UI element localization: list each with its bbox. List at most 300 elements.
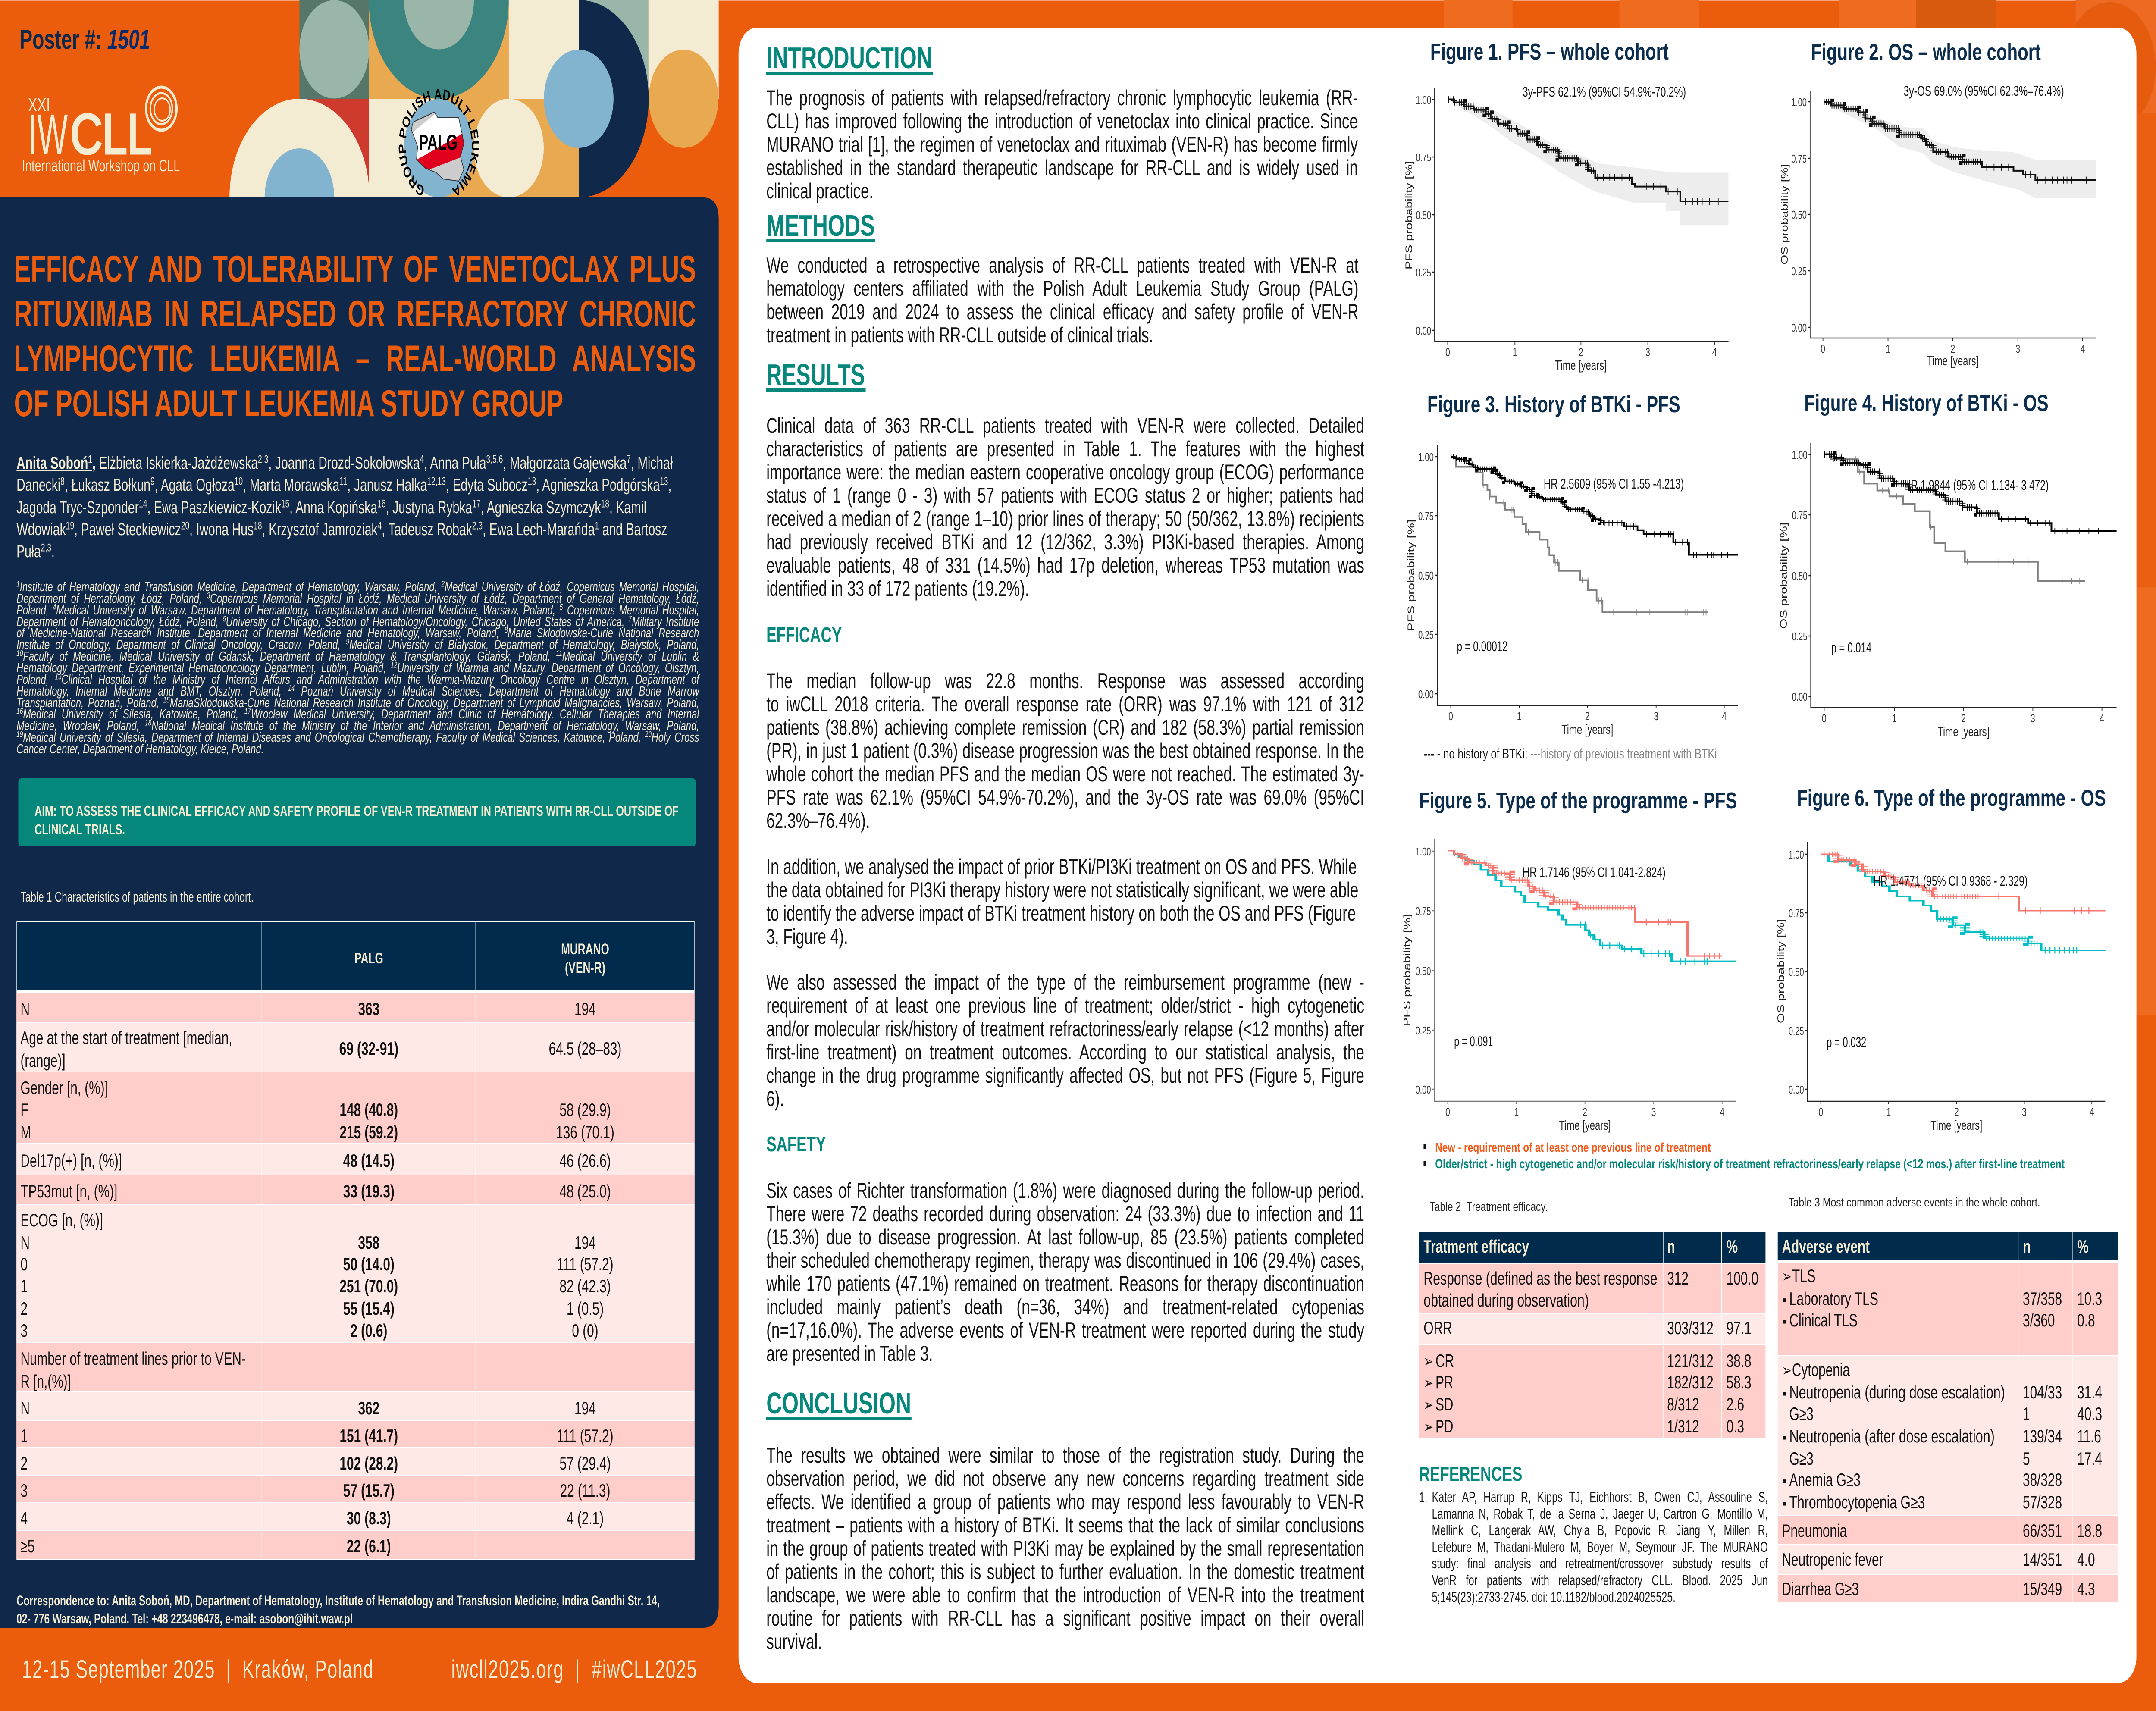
table 2 header [1423,1236,1738,1257]
table 1 row labels: 4 [20,1508,28,1528]
poster number: Poster #: 1501 [19,24,150,55]
table 3 percent values: 0.8 [2077,1310,2095,1330]
table 2 rows: 303/312 [1667,1318,1714,1338]
chart: figure 2 OS whole cohort: 0.25 [1791,265,1807,278]
title: figure 4: Figure 4. History of BTKi - OS [1804,390,2049,416]
affiliations: 16Medical University of Silesia, Katowice, Poland, 17Wrocław Medical University, Department and Clinic of Hematology, Cellular Therapies and Internal [16,706,699,721]
chart: figure 4 history of BTKi OS: 0.25 [1792,630,1807,643]
chart: figure 2 OS whole cohort: 0 [1821,342,1825,355]
table 2 rows: 8/312 [1667,1394,1699,1414]
chart: figure 5 type of programme PFS: 2 [1583,1106,1587,1119]
table 2 rows: 38.8 [1727,1351,1752,1371]
table 3 event labels: ▪ [1783,1313,1786,1330]
text: results overview [766,414,1364,600]
chart: figure 5 type of programme PFS: 1 [1514,1106,1519,1119]
table 2 rows: ➢ [1423,1352,1433,1370]
text: efficacy paragraph 2: In addition, we analysed the impact of prior BTKi/PI3Ki treatment on OS and PFS. While [766,855,1357,879]
affiliations: Cancer Center, Department of Hematology, Kielce, Poland. [16,741,264,756]
text: safety: (n=17,16.0%). The adverse events of VEN-R treatment were reported during the study [766,1318,1364,1342]
text: safety: Six cases of Richter transformation (1.8%) were diagnosed during the follow-up period. [766,1178,1364,1203]
chart: figure 6 type of programme OS: 2 [1954,1106,1959,1119]
table 1 row labels: M [20,1122,31,1142]
table 1 row labels: N [20,1398,30,1418]
table 3 n values: 3/360 [2023,1310,2055,1330]
chart: figure 3 history of BTKi PFS: p = 0.00012 [1457,639,1507,654]
table 3 event labels: Neutropenic fever [1782,1549,1883,1570]
table 2 rows: 97.1 [1727,1318,1752,1338]
main title: OF POLISH ADULT LEUKEMIA STUDY GROUP [14,383,563,424]
chart: figure 5 type of programme PFS: p = 0.091 [1454,1034,1493,1049]
chart: figure 2 OS whole cohort: 1.00 [1791,96,1807,109]
text: conclusion: survival. [766,1630,822,1654]
chart: figure 2 OS whole cohort: 0.00 [1791,322,1807,334]
table 3 event labels: Diarrhea G≥3 [1782,1579,1859,1599]
table 1 PALG values: 48 (14.5) [343,1150,395,1171]
text: efficacy paragraph 3 [766,971,1364,1110]
authors: Puła2,3. [16,542,55,561]
table 1 row labels: 3 [20,1320,28,1341]
text: reference 1: Lefebure M, Thadani-Mulero M, Boyer M, Seymour JF. The MURANO [1432,1539,1768,1555]
table 3 event labels: ➢ [1782,1267,1792,1285]
text: reference 1: Kater AP, Harrup R, Kipps TJ, Eichhorst B, Owen CJ, Assouline S, [1432,1489,1768,1505]
heading: results: RESULTS [766,358,865,392]
text: results overview: identified in 33 of 172 patients (19.2%). [766,577,1029,601]
table 3 event labels: ➢ [1782,1361,1792,1379]
chart: figure 1 PFS whole cohort: 1 [1513,346,1517,359]
affiliations [16,581,699,755]
authors: Danecki8, Łukasz Bołkun9, Agata Ogłoza10, Marta Morawska11, Janusz Halka12,13, Edyta Subocz13, Agnieszka Podgórska13, [16,476,671,495]
text: safety: their scheduled chemotherapy regimen, therapy was discontinued in 106 (29.4%) cases, [766,1248,1364,1272]
caption: table 2: Table 2 Treatment efficacy. [1430,1200,1548,1214]
reference number: 1. [1419,1490,1427,1506]
text: results overview: status of 1 (range 0 - 3) with 57 patients with ECOG status 2 or higher; patients had [766,483,1364,508]
table 1 PALG values: 22 (6.1) [347,1536,391,1556]
table 3 event labels: Clinical TLS [1789,1310,1858,1330]
table 3 event labels: Cytopenia [1792,1360,1850,1380]
table 3 header: Adverse event [1782,1236,1870,1257]
table 1 row labels: 2 [20,1453,28,1473]
main title: EFFICACY AND TOLERABILITY OF VENETOCLAX PLUS [14,248,696,290]
caption: table 1: Table 1 Characteristics of patients in the entire cohort. [20,889,254,905]
logo: iwCLL: IW [28,103,68,166]
table 1 PALG values: 102 (28.2) [340,1453,398,1473]
affiliations: Hematology, Internal Medicine and BMT, Olsztyn, Poland, 14 Poznań University of Medical Sciences, Department of Hematology and Bone Marrow [16,683,699,699]
text: efficacy paragraph 3: and/or molecular risk/history of treatment refractoriness/early relapse (<12 months) after [766,1017,1364,1041]
text: efficacy paragraph 1: patients (38.8%) achieving complete remission (CR) and 182 (58.3%) partial remission [766,715,1364,740]
chart: figure 5 type of programme PFS: PFS probability [%] [1402,914,1412,1026]
table 2 rows: 312 [1667,1268,1689,1288]
chart: figure 6 type of programme OS: HR 1.4771 (95% CI 0.9368 - 2.329) [1874,873,2028,889]
chart: figure 3 history of BTKi PFS: 0.00 [1418,688,1434,701]
chart: figure 4 history of BTKi OS: 4 [2100,712,2104,725]
table 3 n values: 38/328 [2023,1470,2062,1490]
chart: figure 2 OS whole cohort: 0.50 [1791,209,1807,221]
table 1 header: (VEN-R) [565,960,605,976]
table 1 row labels: Age at the start of treatment [median, [20,1028,232,1048]
aim callout: CLINICAL TRIALS. [34,822,125,838]
text: methods: treatment in patients with RR-CLL outside of clinical trials. [766,323,1153,347]
table 3 n values: 5 [2023,1448,2030,1469]
table 1 PALG values: 362 [358,1398,379,1418]
text: results overview: importance were: the median eastern cooperative oncology group (ECOG) performance [766,460,1364,484]
title: figure 3: Figure 3. History of BTKi - PFS [1427,392,1680,417]
text: safety: are presented in Table 3. [766,1341,933,1366]
chart: figure 5 type of programme PFS: 0.25 [1416,1025,1431,1037]
table 3: adverse events [1778,1232,2118,1602]
text: efficacy paragraph 3: We also assessed the impact of the type of the reimbursement programme (new - [766,970,1364,994]
authors: Wdowiak19, Paweł Steckiewicz20, Iwona Hus18, Krzysztof Jamroziak4, Tadeusz Robak2,3, Ewa Lech-Marańda1 and Bartosz [16,520,667,539]
chart: figure 3 history of BTKi PFS: 4 [1722,710,1727,723]
table 1 row labels: 2 [20,1298,28,1319]
table 3 n values: 139/34 [2023,1426,2062,1446]
chart: figure 2 OS whole cohort: 4 [2081,342,2085,355]
chart: figure 3 history of BTKi PFS: 0.50 [1418,570,1434,582]
chart: figure 5 type of programme PFS: 0.00 [1416,1084,1431,1096]
text: efficacy paragraph 3: first-line treatment) on treatment outcomes. According to our statistical analysis, the [766,1040,1364,1064]
chart: figure 2 OS whole cohort: 0.75 [1791,153,1807,165]
chart: figure 5 type of programme PFS: 3 [1651,1106,1656,1119]
table 1 MURANO values: 58 (29.9) [559,1100,611,1120]
table 1: patient characteristics [16,921,695,1560]
caption: table 3: Table 3 Most common adverse events in the whole cohort. [1789,1196,2040,1210]
affiliations: Medicine, Wrocław, Poland, 18National Medical Institute of the Ministry of the Interior and Administration, Department of Hematology, Warsaw, Poland, [16,718,699,733]
table 1 MURANO values: 1 (0.5) [567,1298,604,1319]
table 2 rows: 121/312 [1667,1351,1714,1371]
table 1 MURANO values: 194 [574,1232,596,1253]
table 1 row labels: ECOG [n, (%)] [20,1210,103,1230]
chart: figure 4 history of BTKi OS: OS probability [%] [1778,523,1789,629]
chart: figure 3 history of BTKi PFS: 0.75 [1418,510,1434,523]
text: efficacy paragraph 1: 62.3%–76.4%). [766,808,870,833]
table 3 percent values: 4.0 [2077,1549,2095,1570]
table 1 MURANO values: 48 (25.0) [559,1181,611,1201]
table 3 event labels: ▪ [1783,1385,1786,1402]
table 3 percent values: 4.3 [2077,1579,2095,1599]
text: introduction: The prognosis of patients with relapsed/refractory chronic lymphocytic leukemia (RR- [766,86,1358,110]
table 1 MURANO values: 64.5 (28–83) [549,1038,621,1059]
text: introduction [766,86,1358,203]
text: introduction: MURANO trial [1], the regimen of venetoclax and rituximab (VEN-R) has become firmly [766,132,1358,157]
chart: figure 1 PFS whole cohort: 2 [1579,346,1583,359]
chart: figure 4 history of BTKi OS: 2 [1961,712,1966,725]
panel: navy left column [0,197,719,1628]
table 3 percent values: 11.6 [2077,1426,2101,1446]
table 1 row labels: 3 [20,1480,28,1501]
table 1 MURANO values: 57 (29.4) [559,1453,611,1473]
logo: PALG Polish Adult Leukemia Group: PALG [419,131,458,155]
table 3 n values: 14/351 [2023,1549,2062,1570]
table 1 row labels: 1 [20,1276,28,1296]
chart: figure 3 history of BTKi PFS: PFS probability [%] [1406,519,1416,631]
table 3 event labels: Laboratory TLS [1789,1288,1878,1309]
table 1 MURANO values: 111 (57.2) [557,1426,614,1446]
logo: iwCLL: CLL [70,103,152,166]
table 1 row labels: Number of treatment lines prior to VEN- [20,1348,246,1369]
table 3 event labels: G≥3 [1789,1448,1814,1469]
authors: Anita Soboń1, Elżbieta Iskierka-Jażdżewska2,3, Joanna Drozd-Sokołowska4, Anna Puła3,5,6, Małgorzata Gajewska7, Michał [16,454,673,473]
table 1 PALG values: 69 (32-91) [339,1038,398,1059]
table 2 header: n [1667,1236,1675,1257]
table 3 event labels: Neutropenia (after dose escalation) [1789,1426,1995,1446]
panel: white content area [739,28,2137,1683]
chart: figure 5 type of programme PFS: 1.00 [1416,846,1431,858]
table 1 MURANO values: 22 (11.3) [560,1480,610,1501]
table 1 MURANO values: 46 (26.6) [559,1150,611,1171]
chart: figure 4 history of BTKi OS: 0.75 [1792,509,1807,522]
table 1 MURANO values: 82 (42.3) [559,1276,611,1296]
table 2 rows: CR [1435,1351,1454,1371]
chart: figure 4 history of BTKi OS: HR 1.9844 (95% CI 1.134- 3.472) [1904,477,2049,493]
text: methods: We conducted a retrospective analysis of RR-CLL patients treated with VEN-R at [766,253,1359,277]
text: methods: between 2019 and 2024 to assess the clinical efficacy and safety profile of VEN-R [766,300,1359,324]
table 1 row labels: 1 [20,1426,28,1446]
table 2 rows: ➢ [1423,1395,1433,1414]
chart: figure 3 history of BTKi PFS: 1 [1517,710,1522,723]
chart: figure 3 history of BTKi PFS: Time [years] [1561,722,1613,737]
decorative geometric header [229,0,719,197]
footer: website and hashtag: iwcll2025.org | #iwCLL2025 [451,1655,697,1683]
table 1 PALG values: 251 (70.0) [340,1276,398,1296]
chart: figure 4 history of BTKi OS [1778,443,2117,739]
main title [14,247,696,426]
chart: figure 4 history of BTKi OS: 3 [2031,712,2035,725]
chart: figure 5 type of programme PFS: 0.75 [1416,905,1431,918]
text: results overview: Clinical data of 363 RR-CLL patients treated with VEN-R were collected. Detailed [766,414,1364,438]
logo: iwCLL: International Workshop on CLL [22,156,180,175]
table 1 PALG values: 215 (59.2) [340,1122,398,1142]
text: introduction: established in the standard therapeutic landscape for RR-CLL and is widely used in [766,156,1358,180]
text: reference 1: Mellink C, Langerak AW, Chyla B, Popovic R, Jiang Y, Millen R, [1432,1522,1768,1538]
affiliations: Transplantation, Poznań, Poland, 15MariaSklodowska-Curie National Research Institute of Oncology, Department of Lymphoid Malignancies, Warsaw, Poland, [16,695,699,710]
table 3 event labels: G≥3 [1789,1404,1814,1424]
affiliations: of Medicine-National Research Institute, Department of Internal Medicine and Hematology, Warsaw, Poland, 8Maria Sklodowska-Curie National Research [16,625,699,640]
chart: figure 6 type of programme OS: 0 [1818,1106,1823,1119]
table 3 event labels: TLS [1792,1266,1816,1286]
title: figure 1: Figure 1. PFS – whole cohort [1430,39,1669,65]
table 2 header: % [1727,1236,1738,1257]
affiliations: 1Institute of Hematology and Transfusion Medicine, Department of Hematology, Warsaw, Poland, 2Medical University of Łódź, Copernicus Memorial Hospital, [16,579,699,594]
text: efficacy paragraph 1: PFS rate was 62.1% (95%CI 54.9%-70.2%), and the 3y-OS rate was 69.0% (95%CI [766,785,1364,809]
heading: methods: METHODS [767,209,875,242]
text: safety: while 170 patients (47.1%) remained on treatment. Reasons for therapy discontinuation [766,1272,1364,1296]
table 1 PALG values: 55 (15.4) [343,1298,395,1319]
table 1 PALG values: 57 (15.7) [343,1480,395,1501]
text: reference 1 [1432,1489,1768,1605]
title: figure 2: Figure 2. OS – whole cohort [1811,39,2041,65]
chart: figure 5 type of programme PFS [1402,839,1736,1133]
text: reference 1: VenR for patients with relapsed/refractory CLL. Blood. 2025 Jun [1432,1572,1768,1588]
chart: figure 1 PFS whole cohort: Time [years] [1555,357,1607,373]
table 1 MURANO values: 111 (57.2) [557,1254,614,1274]
text: efficacy paragraph 1: The median follow-up was 22.8 months. Response was assessed according [766,669,1364,693]
table 2 rows: 58.3 [1727,1372,1752,1392]
chart: figure 2 OS whole cohort: OS probability [%] [1779,164,1790,265]
text: results overview: evaluable patients, 48 of 331 (14.5%) had 17p deletion, whereas TP53 mutation was [766,553,1364,577]
chart: figure 3 history of BTKi PFS: 2 [1585,710,1590,723]
chart: figure 1 PFS whole cohort: 0.00 [1416,325,1431,337]
table 2: treatment efficacy [1419,1232,1765,1438]
chart: figure 5 type of programme PFS: 0.50 [1416,965,1431,978]
table 1 PALG values: 148 (40.8) [340,1100,398,1120]
text: results overview: characteristics of patients are presented in Table 1. The features with the highest [766,437,1364,461]
chart: figure 2 OS whole cohort: 3 [2015,342,2020,355]
table 3 header [1782,1236,2089,1257]
text: conclusion: routine for patients with RR-CLL has a significant positive impact on their overall [766,1606,1364,1630]
text: conclusion: in the group of patients treated with PI3Ki may be explained by the small representation [766,1536,1364,1561]
logo: iwCLL [22,87,180,175]
chart: figure 3 history of BTKi PFS: 3 [1654,710,1658,723]
table 2 header: Tratment efficacy [1423,1236,1529,1257]
text: methods: hematology centers affiliated with the Polish Adult Leukemia Study Group (PALG) [766,276,1359,301]
text: results overview: had previously received BTKi and 12 (12/362, 3.3%) PI3Ki-based therapies. Among [766,530,1364,554]
chart: figure 6 type of programme OS: 0.75 [1789,907,1804,920]
text: safety [766,1179,1364,1365]
subheading: safety: SAFETY [766,1132,826,1156]
table 3 event labels: ▪ [1783,1429,1786,1446]
text: reference 1: 5;145(23):2733-2745. doi: 10.1182/blood.2024025525. [1432,1589,1676,1605]
table 1 PALG values: 2 (0.6) [350,1320,387,1341]
chart: figure 1 PFS whole cohort: 4 [1712,346,1717,359]
text: methods [766,254,1359,347]
table 1 header: PALG [354,950,383,967]
aim callout: AIM: TO ASSESS THE CLINICAL EFFICACY AND SAFETY PROFILE OF VEN-R TREATMENT IN PATIENTS WITH RR-CLL OUTSIDE OF [34,803,679,819]
table 2 rows: obtained during observation) [1423,1290,1589,1310]
text: efficacy paragraph 3: requirement of at least one previous line of treatment; older/strict - high cytogenetic [766,993,1364,1018]
text: efficacy paragraph 2: 3, Figure 4). [766,924,848,949]
chart: figure 1 PFS whole cohort [1404,84,1729,373]
chart: figure 3 history of BTKi PFS: 0.25 [1418,629,1434,641]
authors [16,452,673,563]
chart: figure 2 OS whole cohort: 1 [1886,342,1890,355]
table 1 header [17,922,694,990]
chart: figure 6 type of programme OS: 3 [2022,1106,2027,1119]
text: safety: (15.3%) due to disease progression. At last follow-up, 85 (23.5%) patients completed [766,1225,1364,1249]
heading: references: REFERENCES [1419,1463,1522,1485]
table 3 event labels: ▪ [1783,1473,1786,1489]
chart: figure 4 history of BTKi OS: 0.00 [1792,691,1807,703]
table 1 PALG values: 363 [358,999,379,1019]
table 2 rows: 0.3 [1727,1416,1744,1436]
table 3 percent values: 10.3 [2077,1288,2102,1309]
table 1 row labels: N [20,999,30,1019]
table 1 row labels: F [20,1100,28,1120]
table 2 rows: 2.6 [1727,1394,1744,1414]
chart: figure 6 type of programme OS [1776,842,2106,1133]
chart: figure 1 PFS whole cohort: 0.25 [1416,266,1431,279]
table 1 header: MURANO [561,941,609,958]
text: conclusion: effects. We identified a group of patients who may respond less favourably to VEN-R [766,1490,1364,1514]
table 3 event labels: Anemia G≥3 [1789,1470,1861,1490]
chart: figure 5 type of programme PFS: 0 [1445,1106,1450,1119]
correspondence [16,1592,660,1628]
chart: figure 5 type of programme PFS: Time [years] [1559,1118,1611,1133]
table 3 n values: 57/328 [2023,1492,2062,1512]
table 1 row labels: (range)] [20,1050,66,1071]
text: efficacy paragraph 1 [766,669,1364,832]
chart: figure 1 PFS whole cohort: 3 [1645,346,1650,359]
table 2 rows: ORR [1423,1318,1452,1338]
chart: figure 6 type of programme OS: 1.00 [1789,849,1804,861]
table 2 rows: 100.0 [1727,1268,1758,1288]
text: conclusion: observation period, we did not observe any new concerns regarding treatment side [766,1467,1364,1491]
table 3 percent values: 18.8 [2077,1520,2102,1541]
table 1 MURANO values: 136 (70.1) [556,1122,614,1142]
main title: RITUXIMAB IN RELAPSED OR REFRACTORY CHRONIC [14,293,696,335]
text: efficacy paragraph 1: whole cohort the median PFS and the median OS were not reached. The estimated 3y- [766,762,1364,786]
table 1 row labels: R [n,(%)] [20,1371,71,1391]
chart: figure 1 PFS whole cohort: PFS probability [%] [1404,161,1414,269]
table 3 n values: 66/351 [2023,1520,2062,1541]
text: introduction: clinical practice. [766,179,873,203]
table 1 PALG values [339,999,398,1556]
table 1 MURANO values: 194 [574,1398,596,1418]
affiliations: Poland, 13Clinical Hospital of the Ministry of Internal Affairs and Administration with the Warmia-Mazury Oncology Centre in Olsztyn, Department of [16,672,699,687]
chart: figure 6 type of programme OS: 4 [2090,1106,2094,1119]
authors: Jagoda Tryc-Szponder14, Ewa Paszkiewicz-Kozik15, Anna Kopińska16, Justyna Rybka17, Agnieszka Szymczyk18, Kamil [16,498,646,517]
text: efficacy paragraph 2 [766,855,1358,948]
text: efficacy paragraph 2: to identify the adverse impact of BTKi treatment history on both the OS and PFS (Figure [766,901,1356,925]
table 3 event labels: Thrombocytopenia G≥3 [1789,1492,1925,1512]
chart: figure 3 history of BTKi PFS: 0 [1448,710,1453,723]
background shading of the orange frame [0,0,2156,1015]
table 2 rows: Response (defined as the best response [1423,1268,1658,1288]
table 2 rows: PD [1435,1416,1453,1436]
table 3 percent values: 31.4 [2077,1382,2102,1402]
figure titles [1419,39,2106,814]
text: conclusion [766,1444,1364,1653]
table 1 row labels: 0 [20,1254,28,1274]
table 1 row fills [16,993,695,1559]
chart: figure 1 PFS whole cohort: 0 [1445,346,1450,359]
table 2 rows: ➢ [1423,1373,1433,1392]
table 3 n values [2023,1288,2062,1599]
chart: figure 6 type of programme OS: Time [years] [1930,1118,1982,1133]
text: conclusion: treatment – patients with a history of BTKi. It seems that the lack of similar conclusions [766,1513,1364,1537]
text: conclusion: landscape, we were able to confirm that the introduction of VEN-R into the treatment [766,1583,1364,1607]
chart: figure 2 OS whole cohort: Time [years] [1927,353,1979,368]
table 3 n values: 15/349 [2023,1579,2062,1599]
table 1 row labels: TP53mut [n, (%)] [20,1181,117,1201]
heading: conclusion: CONCLUSION [766,1386,911,1420]
table 3 event labels: ▪ [1783,1292,1786,1308]
text: efficacy paragraph 1: (PR), in just 1 patient (0.3%) disease progression was the best obtained response. In the [766,739,1364,763]
chart: figure 6 type of programme OS: 0.50 [1789,966,1804,978]
main title: LYMPHOCYTIC LEUKEMIA – REAL-WORLD ANALYSIS [14,338,696,379]
table 3 percent values: 40.3 [2077,1404,2102,1424]
chart: figure 3 history of BTKi PFS: 1.00 [1418,451,1434,464]
table 1 MURANO values: 0 (0) [572,1320,599,1341]
chart: figure 4 history of BTKi OS: 0 [1822,712,1827,725]
aim callout [19,778,696,846]
affiliations: 10Faculty of Medicine, Medical University of Gdansk, Department of Haematology & Transplantology, Gdańsk, Poland, 11Medical University of Lublin & [16,649,699,664]
table 1 PALG values: 50 (14.0) [343,1254,395,1274]
chart: figure 4 history of BTKi OS: Time [years] [1938,724,1990,739]
text: reference 1: study: final analysis and retreatment/crossover substudy results of [1432,1555,1768,1571]
heading: introduction: INTRODUCTION [766,41,932,75]
chart: figure 4 history of BTKi OS: p = 0.014 [1831,640,1871,655]
title: figure 5: Figure 5. Type of the programme - PFS [1419,788,1737,814]
table 1 row labels: N [20,1232,30,1253]
legend: programme types: Older/strict - high cytogenetic and/or molecular risk/history of treatment refractoriness/early relapse (<12 mos.) after first-line treatment [1435,1156,2065,1171]
table 3 event labels [1782,1266,2005,1599]
table 3 event labels: ▪ [1783,1495,1786,1512]
chart: figure 2 OS whole cohort: 2 [1950,342,1955,355]
chart: figure 1 PFS whole cohort: 0.75 [1416,151,1431,164]
table 2 rows: ➢ [1423,1417,1433,1436]
title: figure 6: Figure 6. Type of the programme - OS [1797,785,2106,811]
text: conclusion: of patients in the cohort; this is subject to further evaluation. In the domestic treatment [766,1560,1364,1584]
chart: figure 6 type of programme OS: 1 [1887,1106,1891,1119]
